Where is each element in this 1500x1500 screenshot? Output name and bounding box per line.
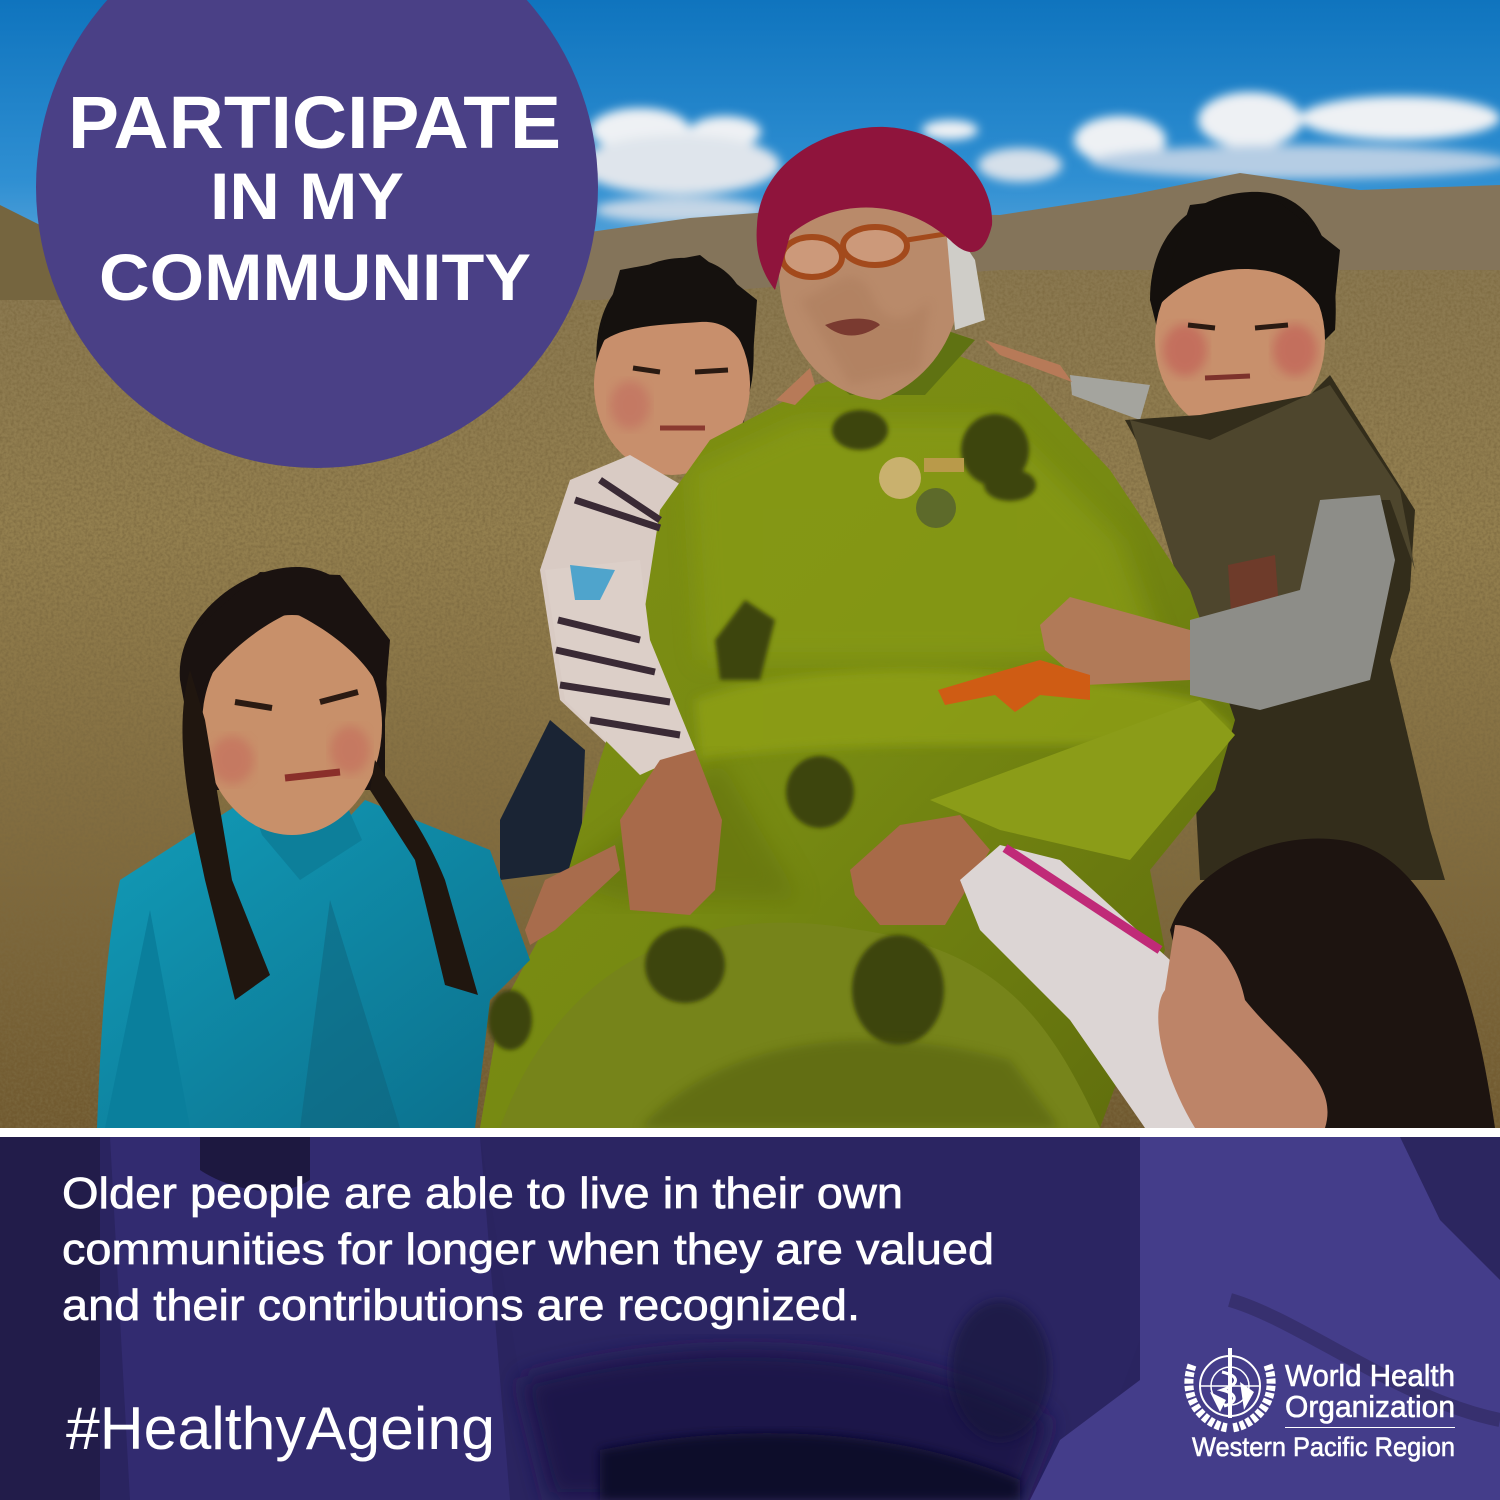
beret (757, 127, 992, 290)
sky (0, 0, 1500, 232)
boy in striped shirt (500, 255, 757, 880)
logo wordmark: Western Pacific Region (1192, 1432, 1455, 1462)
robe flower motifs (488, 410, 1036, 1050)
body text: Older people are able to live in their own (62, 1169, 903, 1218)
hands on shoulders (776, 340, 1072, 405)
hashtag: #HealthyAgeing (66, 1395, 495, 1462)
heading (68, 81, 561, 314)
logo wordmark (1192, 1358, 1455, 1462)
ground texture (0, 270, 1500, 1128)
ground (0, 270, 1500, 1128)
icon: WHO emblem (1189, 1348, 1271, 1428)
orange scarf (938, 660, 1090, 712)
white hair (947, 238, 985, 330)
white divider band (0, 1128, 1500, 1137)
girl left (97, 567, 620, 1128)
heading: PARTICIPATE (68, 81, 561, 164)
collar (846, 332, 975, 395)
bottom panel: purple tinted photo (0, 1137, 1500, 1500)
face (779, 204, 960, 400)
braids (182, 670, 270, 1000)
badges (879, 457, 921, 499)
girl front right (960, 838, 1495, 1128)
heading: COMMUNITY (99, 240, 531, 314)
body text: communities for longer when they are valued (62, 1225, 994, 1274)
robe (480, 350, 1235, 1128)
hills (574, 173, 1500, 300)
body text (62, 1169, 994, 1330)
boy in vest (1070, 192, 1445, 880)
logo wordmark: World Health (1285, 1358, 1455, 1393)
clouds (580, 92, 1500, 223)
arm and hand of boy in vest (1040, 495, 1395, 710)
grandmother (480, 127, 1235, 1128)
heading: IN MY (210, 159, 404, 233)
WHO logo (1189, 1348, 1455, 1462)
title circle (36, 0, 598, 468)
photo: grandmother and children on the steppe (0, 0, 1500, 1128)
striped arm and hand of boy (545, 480, 990, 925)
robe highlights (560, 420, 1235, 900)
body text: and their contributions are recognized. (62, 1281, 860, 1330)
logo wordmark: Organization (1285, 1389, 1455, 1424)
